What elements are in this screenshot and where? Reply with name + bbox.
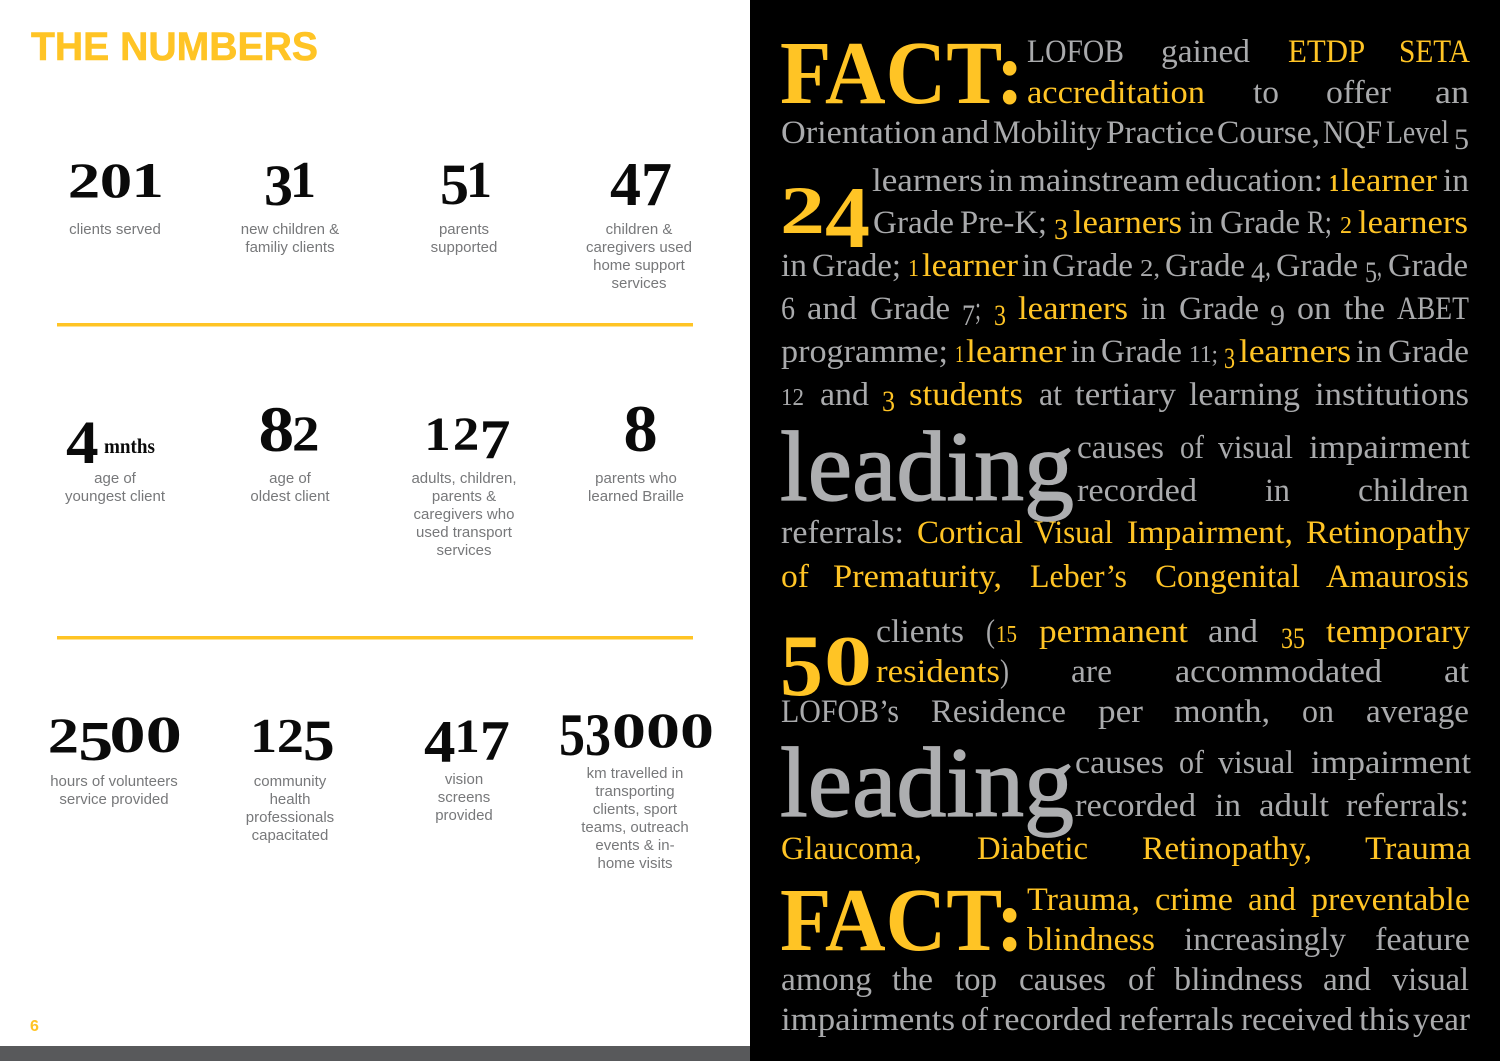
fact block: leading causes in adults: impairment xyxy=(1311,745,1471,781)
fact block: trauma, crime and preventable blindness: of xyxy=(1128,962,1155,998)
fact block: 24 learners in mainstream education: ; xyxy=(975,291,981,327)
stat: 4 months age of youngest client: youngest client xyxy=(65,488,166,505)
fact block: 50 clients at residence: clients xyxy=(876,614,964,650)
stat: 53000 km travelled: clients, sport xyxy=(593,801,678,818)
fact block: ETDP SETA accreditation: ETDP xyxy=(1288,34,1365,70)
fact block: trauma, crime and preventable blindness: crime xyxy=(1155,882,1233,918)
fact block: 24 learners in mainstream education: the xyxy=(1344,291,1385,327)
stat: 417 vision screens provided xyxy=(424,709,510,824)
stat: 53000 km travelled: events & in- xyxy=(595,837,675,854)
stat: 201 clients served: 1 xyxy=(131,152,164,208)
fact block: 50 clients at residence: and xyxy=(1208,614,1259,650)
fact block: 24 learners in mainstream education: learners xyxy=(1018,291,1128,327)
fact block: leading causes in children: Cortical xyxy=(917,515,1023,551)
stat: 201 clients served: 0 xyxy=(100,152,132,208)
stat: 31 new children and family clients: new children & xyxy=(241,221,339,238)
fact block: 24 learners in mainstream education: 6 xyxy=(781,291,795,327)
fact block: trauma, crime and preventable blindness: among xyxy=(781,962,872,998)
fact block: 24 learners in mainstream education: 5 xyxy=(1365,256,1377,289)
stat: 201 clients served: clients served xyxy=(69,221,161,238)
fact block: 50 clients at residence: residents xyxy=(876,654,1000,690)
fact block: trauma, crime and preventable blindness: top xyxy=(955,962,997,998)
fact block: trauma, crime and preventable blindness: and xyxy=(1248,882,1296,918)
fact block: ETDP SETA accreditation: NQF xyxy=(1323,115,1382,151)
stat: 8 parents who learned Braille xyxy=(588,392,684,505)
fact block: 24 learners in mainstream education: 12 xyxy=(781,385,804,411)
fact block: 24 learners in mainstream education: Grade xyxy=(1165,248,1245,284)
fact block: 50 clients at residence: average xyxy=(1366,694,1469,730)
stat: 2500 hours of volunteers service: hours of volunteers xyxy=(50,773,178,790)
fact block: 24 learners in mainstream education: in xyxy=(1356,334,1382,370)
stat: 51 parents supported: 1 xyxy=(466,152,492,209)
fact block: ETDP SETA accreditation: offer xyxy=(1326,75,1391,111)
fact block: leading causes in adults: visual xyxy=(1218,745,1294,781)
fact block: 24 learners in mainstream education: learner xyxy=(922,248,1018,284)
fact block: leading causes in children: impairment xyxy=(1309,430,1470,466)
stat: 201 clients served xyxy=(68,152,164,238)
fact block: 24 learners in mainstream education: 1 xyxy=(908,256,919,282)
stat: 31 new children and family clients: 1 xyxy=(290,152,316,209)
fact block: trauma, crime and preventable blindness: causes xyxy=(1019,962,1106,998)
fact block: trauma, crime and preventable blindness: blindness xyxy=(1027,922,1155,958)
fact block: 24 learners in mainstream education: Grade xyxy=(870,291,950,327)
fact block: trauma, crime and preventable blindness: referrals xyxy=(1119,1002,1234,1038)
stat: 125 community health professionals capacitated: 1 xyxy=(250,709,277,763)
fact block: 50 clients at residence: LOFOB’s xyxy=(781,694,899,730)
stat: 53000 km travelled: km travelled in xyxy=(587,765,683,782)
stat: 47 children and caregivers used home support: services xyxy=(611,275,667,292)
fact block: 24 learners in mainstream education: 4 xyxy=(825,170,870,267)
stat: 82 age of oldest client: oldest client xyxy=(250,488,330,505)
fact block: 24 learners in mainstream education: learners xyxy=(1239,334,1351,370)
fact block: 24 learners in mainstream education: in xyxy=(1141,291,1166,327)
fact block: 24 learners in mainstream education xyxy=(780,163,1469,419)
fact block: 50 clients at residence: Residence xyxy=(931,694,1066,730)
stat: 51 parents supported: parents xyxy=(439,221,489,238)
stat: 82 age of oldest client: 8 xyxy=(259,393,294,465)
fact block: 50 clients at residence: 15 xyxy=(996,622,1017,648)
stat: 4 months age of youngest client: 4 xyxy=(66,409,99,477)
stat: 8 parents who learned Braille: parents who xyxy=(595,470,677,487)
fact block: ETDP SETA accreditation: Mobility xyxy=(993,115,1102,151)
fact block: leading causes in children: in xyxy=(1265,473,1290,509)
fact block: 50 clients at residence: are xyxy=(1071,654,1112,690)
stat: 82 age of oldest client: age of xyxy=(269,470,312,487)
fact block: leading causes in adults: Trauma xyxy=(1365,831,1471,867)
fact block: 50 clients at residence: on xyxy=(1302,694,1334,730)
fact block: 24 learners in mainstream education: learning xyxy=(1189,377,1300,413)
stat: 127 adults, children, parents and caregivers used transport: services xyxy=(436,542,492,559)
fact block: 50 clients at residence: accommodated xyxy=(1175,654,1383,690)
fact block: leading causes in children: Leber’s xyxy=(1030,559,1127,595)
stat: 8 parents who learned Braille: learned Braille xyxy=(588,488,684,505)
stat: 53000 km travelled: 53 xyxy=(559,702,611,768)
fact block: trauma, crime and preventable blindness: received xyxy=(1241,1002,1353,1038)
fact block: 24 learners in mainstream education: students xyxy=(909,377,1023,413)
stat: 127 adults, children, parents and caregivers used transport: parents & xyxy=(432,488,496,505)
fact block: leading causes in children: children xyxy=(1358,473,1469,509)
fact block: trauma, crime and preventable blindness: and xyxy=(1323,962,1371,998)
fact block: 50 clients at residence: at xyxy=(1444,654,1469,690)
stat: 47 children and caregivers used home support: caregivers used xyxy=(586,239,692,256)
fact block: trauma, crime and preventable blindness: FACT: xyxy=(780,871,1024,970)
stat: 2500 hours of volunteers service: 00 xyxy=(109,706,182,763)
fact block: leading causes in children: of xyxy=(781,559,809,595)
fact block: leading causes in adults: Retinopathy, xyxy=(1142,831,1312,867)
fact block: 24 learners in mainstream education: learner xyxy=(966,334,1066,370)
fact block: trauma, crime and preventable blindness: the xyxy=(892,962,933,998)
fact block: 24 learners in mainstream education: , xyxy=(1377,248,1382,284)
fact block: 24 learners in mainstream education: 2 xyxy=(780,172,825,248)
fact block: trauma, crime and preventable blindness xyxy=(780,871,1470,1038)
fact block: 24 learners in mainstream education: Grade xyxy=(1179,291,1259,327)
fact block: trauma, crime and preventable blindness: increasingly xyxy=(1184,922,1346,958)
fact block: 24 learners in mainstream education: Grade xyxy=(1052,248,1133,284)
stat: 125 community health professionals capacitated: 2 xyxy=(277,709,304,763)
stat: 125 community health professionals capacitated: capacitated xyxy=(252,827,328,844)
fact block: trauma, crime and preventable blindness: recorded xyxy=(993,1002,1113,1038)
fact block: ETDP SETA accreditation: LOFOB xyxy=(1027,34,1124,70)
stat: 51 parents supported: 5 xyxy=(440,152,469,217)
fact block: leading causes in children xyxy=(780,411,1471,595)
fact block: 50 clients at residence: ( xyxy=(986,614,995,650)
fact block: 24 learners in mainstream education: institutions xyxy=(1315,377,1469,413)
stat: 417 vision screens provided: 1 xyxy=(454,709,480,763)
stat: 127 adults, children, parents and caregivers used transport: 7 xyxy=(480,409,510,470)
stat: 4 months age of youngest client xyxy=(65,409,166,505)
fact block: leading causes in adults: Diabetic xyxy=(977,831,1088,867)
fact block: 24 learners in mainstream education: in xyxy=(988,163,1013,199)
fact block: 24 learners in mainstream education: 2 xyxy=(1340,213,1352,239)
fact block: leading causes in children: leading xyxy=(780,411,1074,522)
fact block: leading causes in children: visual xyxy=(1218,430,1293,466)
fact block: leading causes in adults: referrals: xyxy=(1346,788,1469,824)
stat: 31 new children and family clients: familiy clients xyxy=(245,239,335,256)
fact block: ETDP SETA accreditation: and xyxy=(941,115,989,151)
stat: 2500 hours of volunteers service: 5 xyxy=(78,711,113,772)
fact block: leading causes in adults: Glaucoma, xyxy=(781,831,922,867)
grey footer bar xyxy=(0,1046,750,1061)
fact block: 24 learners in mainstream education: 11; xyxy=(1189,342,1218,368)
fact block: trauma, crime and preventable blindness: Trauma, xyxy=(1027,882,1140,918)
stat: 2500 hours of volunteers service: 2 xyxy=(48,709,79,763)
stat: 125 community health professionals capacitated: community xyxy=(254,773,327,790)
fact block: leading causes in adults: of xyxy=(1179,745,1204,781)
fact block: leading causes in children: causes xyxy=(1077,430,1164,466)
stat: 125 community health professionals capacitated: professionals xyxy=(246,809,334,826)
stat: 47 children and caregivers used home support: 7 xyxy=(641,151,672,219)
fact block: 24 learners in mainstream education: mainstream xyxy=(1019,163,1180,199)
fact block: 24 learners in mainstream education: Grade; xyxy=(812,248,901,284)
fact block: ETDP SETA accreditation: Level xyxy=(1386,115,1449,151)
title: THE NUMBERS xyxy=(31,25,318,69)
stat: 31 new children and family clients: 3 xyxy=(264,153,293,218)
fact block: ETDP SETA accreditation: Practice xyxy=(1106,115,1214,151)
fact block: ETDP SETA accreditation: gained xyxy=(1161,34,1250,70)
stat: 127 adults, children, parents and caregivers used transport: 2 xyxy=(453,407,479,460)
stat: 4 months age of youngest client: mnths xyxy=(104,434,155,458)
page number: 6 xyxy=(30,1018,39,1035)
fact block: 50 clients at residence: 35 xyxy=(1281,622,1305,655)
stat: 125 community health professionals capacitated: health xyxy=(270,791,310,808)
fact block: 24 learners in mainstream education: in xyxy=(1071,334,1096,370)
stat: 53000 km travelled: transporting xyxy=(595,783,675,800)
stat: 47 children and caregivers used home support: children & xyxy=(606,221,672,238)
fact block: 50 clients at residence: ) xyxy=(1000,654,1009,690)
stat: 53000 km travelled: 000 xyxy=(612,702,714,758)
fact block: ETDP SETA accreditation: accreditation xyxy=(1027,75,1205,111)
fact block: ETDP SETA accreditation xyxy=(780,24,1470,156)
fact block: leading causes in children: Visual xyxy=(1034,515,1113,551)
fact block: ETDP SETA accreditation: to xyxy=(1253,75,1279,111)
fact block: 24 learners in mainstream education: in xyxy=(1443,163,1469,199)
stat: 51 parents supported: supported xyxy=(431,239,497,256)
fact block: leading causes in children: Amaurosis xyxy=(1326,559,1469,595)
fact block: 50 clients at residence: permanent xyxy=(1039,614,1188,650)
fact block: trauma, crime and preventable blindness: feature xyxy=(1375,922,1470,958)
fact block: leading causes in children: of xyxy=(1180,430,1204,466)
fact block: trauma, crime and preventable blindness: impairments xyxy=(781,1002,955,1038)
fact block: 24 learners in mainstream education: 2, xyxy=(1140,256,1160,282)
fact block: 24 learners in mainstream education: and xyxy=(820,377,870,413)
divider line 1 xyxy=(57,323,693,326)
fact block: 24 learners in mainstream education: 4 xyxy=(1251,256,1265,289)
fact block: 24 learners in mainstream education: Grade xyxy=(1101,334,1182,370)
fact block: 24 learners in mainstream education: 1 xyxy=(955,342,964,368)
stat: 417 vision screens provided: 7 xyxy=(480,709,510,773)
fact block: 24 learners in mainstream education: ABET xyxy=(1397,291,1469,327)
fact block: 24 learners in mainstream education: 9 xyxy=(1270,299,1285,332)
fact block: 24 learners in mainstream education: in xyxy=(1022,248,1048,284)
fact block: trauma, crime and preventable blindness: of xyxy=(961,1002,988,1038)
fact block: 24 learners in mainstream education: at xyxy=(1039,377,1062,413)
fact block: ETDP SETA accreditation: SETA xyxy=(1399,34,1470,70)
stat: 2500 hours of volunteers service xyxy=(48,706,182,808)
fact block: 24 learners in mainstream education: education: xyxy=(1185,163,1323,199)
fact block: 24 learners in mainstream education: on xyxy=(1297,291,1331,327)
fact block: 24 learners in mainstream education: learners xyxy=(1358,205,1468,241)
fact block: ETDP SETA accreditation: FACT: xyxy=(780,24,1024,123)
stat: 125 community health professionals capacitated xyxy=(246,709,335,844)
stat: 47 children and caregivers used home support: home support xyxy=(593,257,686,274)
fact block: leading causes in children: Retinopathy xyxy=(1306,515,1471,551)
fact block: leading causes in children: referrals: xyxy=(781,515,904,551)
divider line 2 xyxy=(57,636,693,640)
fact block: leading causes in adults: causes xyxy=(1075,745,1164,781)
fact block: 24 learners in mainstream education: Pre-K; xyxy=(960,205,1047,241)
stat: 127 adults, children, parents and caregivers used transport xyxy=(411,407,517,559)
fact block: ETDP SETA accreditation: Orientation xyxy=(781,115,937,151)
fact block: leading causes in children: Prematurity, xyxy=(833,559,1002,595)
stat: 417 vision screens provided: 4 xyxy=(424,709,455,776)
panel: facts (right page) xyxy=(750,0,1500,1061)
fact block: ETDP SETA accreditation: 5 xyxy=(1454,123,1469,156)
stat: 82 age of oldest client: 2 xyxy=(292,406,319,461)
stat: 127 adults, children, parents and caregivers used transport: caregivers who xyxy=(414,506,514,523)
fact block: 24 learners in mainstream education: tertiary xyxy=(1075,377,1177,413)
fact block: 24 learners in mainstream education: Grade xyxy=(1388,248,1468,284)
stat: 127 adults, children, parents and caregivers used transport: adults, children, xyxy=(411,470,517,487)
fact block: 24 learners in mainstream education: Grade xyxy=(1220,205,1300,241)
fact block: ETDP SETA accreditation: an xyxy=(1435,75,1469,111)
fact block: leading causes in adults: adult xyxy=(1259,788,1329,824)
fact block: 24 learners in mainstream education: programme; xyxy=(781,334,948,370)
fact block: leading causes in adults: leading xyxy=(780,727,1074,838)
fact block: leading causes in children: Impairment, xyxy=(1127,515,1293,551)
fact block: 24 learners in mainstream education: in xyxy=(1189,205,1213,241)
fact block: leading causes in adults: recorded xyxy=(1075,788,1197,824)
fact block: 24 learners in mainstream education: 3 xyxy=(1054,213,1068,246)
stat: 47 children and caregivers used home support: 4 xyxy=(610,151,641,219)
fact block: 50 clients at residence: per xyxy=(1098,694,1143,730)
fact block: 24 learners in mainstream education: 3 xyxy=(994,299,1006,332)
fact block: leading causes in children: recorded xyxy=(1077,473,1198,509)
fact block: 50 clients at residence: month, xyxy=(1174,694,1270,730)
fact block: 24 learners in mainstream education: 3 xyxy=(882,385,895,418)
stat: 82 age of oldest client xyxy=(250,393,330,505)
fact block: 24 learners in mainstream education: learners xyxy=(1073,205,1182,241)
stat: 51 parents supported xyxy=(431,152,497,256)
fact block: 24 learners in mainstream education: Grade xyxy=(1388,334,1469,370)
fact block: trauma, crime and preventable blindness: this xyxy=(1359,1002,1410,1038)
fact block: trauma, crime and preventable blindness: visual xyxy=(1392,962,1469,998)
fact block: leading causes in children: Congenital xyxy=(1155,559,1300,595)
stat: 4 months age of youngest client: age of xyxy=(94,470,137,487)
fact block: 24 learners in mainstream education: 1 xyxy=(1329,171,1339,197)
stat: 417 vision screens provided: provided xyxy=(435,807,493,824)
fact block: trauma, crime and preventable blindness: year xyxy=(1413,1002,1470,1038)
fact block: 24 learners in mainstream education: 7 xyxy=(962,299,975,332)
fact block: 50 clients at residence xyxy=(780,614,1471,730)
fact block: 24 learners in mainstream education: R; xyxy=(1307,205,1332,241)
fact block: 24 learners in mainstream education: , xyxy=(1265,248,1271,284)
stat: 53000 km travelled xyxy=(559,702,714,872)
fact block: 50 clients at residence: 0 xyxy=(824,623,872,701)
fact block: leading causes in adults xyxy=(780,727,1471,867)
fact block: leading causes in adults: in xyxy=(1215,788,1241,824)
panel: the numbers (left page) xyxy=(0,0,750,1061)
fact block: 24 learners in mainstream education: in xyxy=(781,248,807,284)
fact block: 24 learners in mainstream education: Grade xyxy=(1276,248,1358,284)
stat: 417 vision screens provided: screens xyxy=(438,789,490,806)
stat: 47 children and caregivers used home support xyxy=(586,151,692,292)
fact block: 24 learners in mainstream education: learners xyxy=(872,163,983,199)
stat: 127 adults, children, parents and caregivers used transport: 1 xyxy=(424,407,451,460)
stat: 31 new children and family clients xyxy=(241,152,339,256)
fact block: 50 clients at residence: temporary xyxy=(1326,614,1471,650)
stat: 417 vision screens provided: vision xyxy=(445,771,483,788)
fact block: trauma, crime and preventable blindness: blindness xyxy=(1174,962,1303,998)
stat: 201 clients served: 2 xyxy=(68,152,100,208)
fact block: 50 clients at residence: 5 xyxy=(780,618,823,715)
fact block: trauma, crime and preventable blindness: preventable xyxy=(1311,882,1470,918)
fact block: ETDP SETA accreditation: Course, xyxy=(1217,115,1320,151)
stat: 53000 km travelled: teams, outreach xyxy=(581,819,689,836)
stat: 125 community health professionals capacitated: 5 xyxy=(303,710,335,773)
stat: 127 adults, children, parents and caregivers used transport: used transport xyxy=(416,524,513,541)
fact block: 24 learners in mainstream education: and xyxy=(807,291,858,327)
stat: 8 parents who learned Braille: 8 xyxy=(624,392,658,466)
fact block: 24 learners in mainstream education: learner xyxy=(1341,163,1437,199)
stat: 2500 hours of volunteers service: service provided xyxy=(59,791,169,808)
fact block: 24 learners in mainstream education: Grade xyxy=(873,205,954,241)
stat: 53000 km travelled: home visits xyxy=(597,855,673,872)
fact block: 24 learners in mainstream education: 3 xyxy=(1224,342,1235,375)
